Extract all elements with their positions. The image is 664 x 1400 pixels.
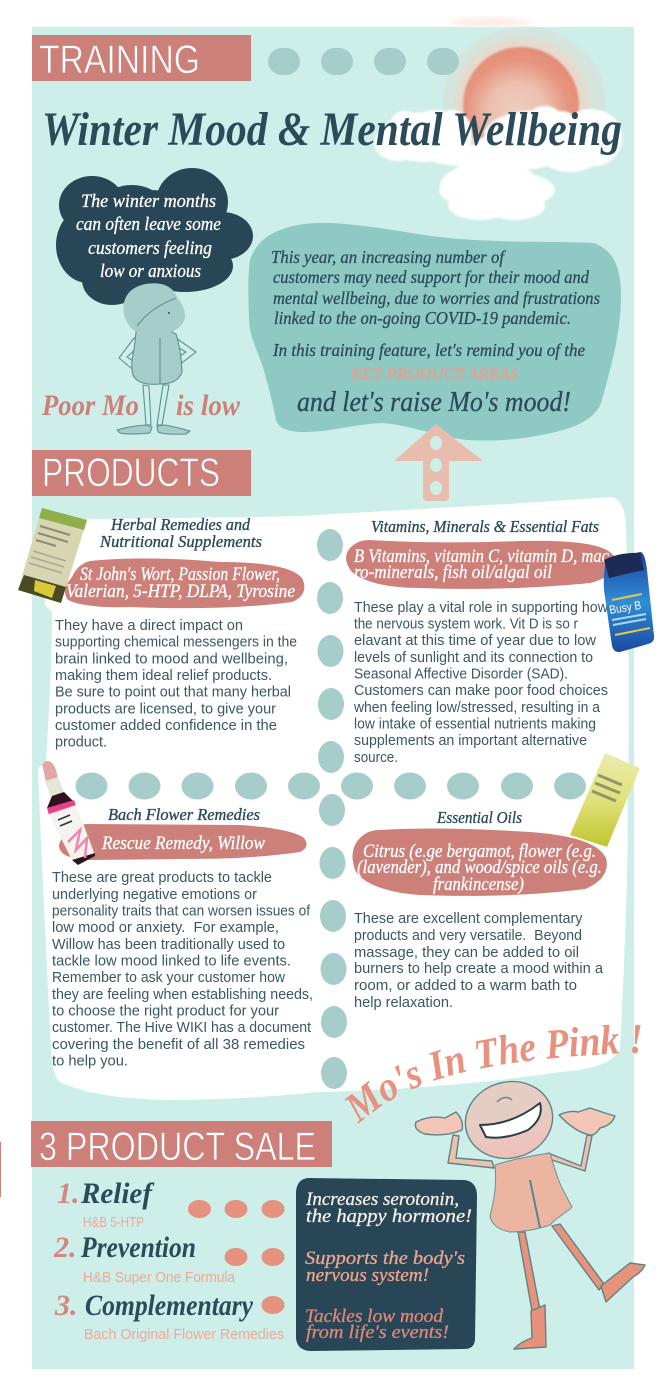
intro text: and let's raise Mo's mood! — [297, 386, 571, 418]
product: herbal box — [18, 508, 87, 603]
benefit 1 — [305, 1189, 472, 1227]
list: three products — [53, 1177, 284, 1343]
pill text — [357, 841, 602, 895]
product: Bach bottle — [42, 761, 95, 865]
intro text — [271, 247, 600, 418]
pink product pill — [346, 540, 615, 589]
benefit 1: the happy hormone! — [306, 1206, 472, 1227]
head — [457, 1072, 561, 1168]
body text: the nervous system work. Vit D is so r — [354, 616, 578, 632]
body text: levels of sunlight and its connection to — [354, 649, 593, 666]
item 1 — [57, 1177, 155, 1231]
benefit 3 — [305, 1306, 449, 1343]
horizontal divider dots — [76, 772, 586, 800]
cloud text: The winter months — [81, 191, 216, 212]
body text: to help you. — [52, 1052, 128, 1070]
section: herbal remedies — [55, 515, 304, 751]
training header: TRAINING — [39, 38, 200, 82]
pill text: Rescue Remedy, Willow — [101, 833, 265, 854]
pink product pill — [59, 824, 307, 860]
benefit 2: nervous system! — [306, 1265, 429, 1286]
header dots — [268, 48, 459, 75]
body text: source. — [354, 749, 398, 766]
benefit 3: Tackles low mood — [305, 1306, 444, 1327]
cloud behind title — [374, 106, 622, 220]
body text: making them ideal relief products. — [55, 667, 272, 684]
body text: help relaxation. — [354, 994, 453, 1011]
product: Busy B bottle: Busy B — [608, 598, 642, 617]
body text: These are great products to tackle — [52, 869, 272, 886]
intro text: customers may need support for their mood and — [273, 267, 590, 287]
pill text — [66, 564, 295, 602]
body text: customer. The Hive WIKI has a document — [52, 1019, 312, 1036]
intro blob — [248, 223, 621, 441]
character: happy Mo — [415, 1072, 645, 1349]
body text: Seasonal Affective Disorder (SAD). — [354, 666, 568, 682]
intro text: This year, an increasing number of — [271, 247, 507, 267]
item 3: Complementary — [85, 1289, 254, 1322]
body text — [354, 910, 604, 1011]
body text: when feeling low/stressed, resulting in a — [353, 699, 601, 716]
pill text: frankincense) — [433, 874, 524, 895]
body text: underlying negative emotions or — [52, 886, 257, 903]
character: sad Mo — [117, 283, 196, 434]
connecting dots — [188, 1200, 284, 1314]
pill text: Valerian, 5-HTP, DLPA, Tyrosine — [66, 581, 295, 602]
caption: Poor Mo is low — [41, 389, 241, 422]
body text: burners to help create a mood within a — [354, 960, 604, 977]
3 product sale header: 3 PRODUCT SALE — [39, 1125, 316, 1169]
body text: tackle low mood linked to life events. — [52, 952, 291, 970]
item 3: 3. — [54, 1289, 78, 1322]
benefit 3: from life's events! — [306, 1322, 449, 1343]
item 1: H&B 5-HTP — [83, 1214, 144, 1231]
body text: products and very versatile. Beyond — [354, 927, 582, 944]
body text: Remember to ask your customer how — [52, 969, 285, 986]
section: Bach flower remedies — [52, 805, 313, 1070]
heading — [99, 515, 262, 551]
product: Busy B bottle — [604, 552, 654, 652]
item 1: Relief — [80, 1177, 155, 1210]
pill text: ro-minerals, fish oil/algal oil — [354, 562, 552, 583]
cloud text: low or anxious — [100, 261, 201, 282]
pink product pill — [65, 558, 304, 608]
smile — [480, 1103, 541, 1138]
body text: products are licensed, to give your — [55, 700, 276, 717]
body text: room, or added to a warm bath to — [354, 977, 577, 994]
cloud text: customers feeling — [88, 238, 212, 259]
cloud text — [76, 191, 221, 282]
benefit 2 — [305, 1248, 465, 1286]
left edge mark — [0, 1142, 1, 1197]
item 2: H&B Super One Formula — [83, 1269, 236, 1286]
pill text: B Vitamins, vitamin C, vitamin D, mac — [354, 546, 609, 567]
heading: Nutritional Supplements — [99, 532, 262, 551]
section: vitamins — [346, 517, 615, 766]
products header: PRODUCTS — [42, 451, 220, 495]
intro text: mental wellbeing, due to worries and frustrations — [273, 288, 600, 308]
body text: Willow has been traditionally used to — [52, 936, 285, 953]
heading: Bach Flower Remedies — [108, 805, 260, 824]
benefits box — [296, 1178, 477, 1351]
body text: supplements an important alternative — [354, 732, 587, 749]
vertical divider dots — [317, 529, 347, 1089]
up arrow — [394, 424, 483, 501]
body text: low mood or anxiety. For example, — [52, 919, 279, 936]
cloud text: can often leave some — [76, 214, 221, 235]
body text: These play a vital role in supporting how — [354, 599, 608, 616]
pink product pill — [353, 829, 607, 896]
product: essential oil box — [570, 753, 640, 847]
heading: Vitamins, Minerals & Essential Fats — [371, 517, 599, 536]
body text: product. — [55, 734, 107, 751]
body text: low intake of essential nutrients making — [354, 716, 596, 732]
pill text: St John's Wort, Passion Flower, — [80, 564, 280, 585]
item 1: 1. — [57, 1177, 80, 1210]
intro text: linked to the on-going COVID-19 pandemic. — [274, 308, 571, 328]
body text — [52, 869, 313, 1070]
sun — [443, 17, 605, 173]
body text: massage, they can be added to oil — [354, 944, 579, 961]
caption: Poor Mo is low: Poor Mo — [41, 389, 139, 422]
Mo's In The Pink caption: Mo's In The Pink ! — [344, 1024, 641, 1124]
item 2: Prevention — [80, 1231, 196, 1264]
item 2 — [53, 1231, 236, 1286]
pill text: (lavender), and wood/spice oils (e.g. — [357, 857, 602, 878]
dark thought cloud — [56, 168, 253, 305]
body text: they are feeling when establishing needs, — [52, 986, 313, 1003]
body text: elavant at this time of year due to low — [354, 632, 596, 649]
intro text: KEY PRODUCT AREAS — [350, 366, 518, 383]
body text: customer added confidence in the — [55, 717, 277, 734]
benefit 1: Increases serotonin, — [305, 1189, 459, 1210]
intro text: In this training feature, let's remind you of the — [272, 340, 585, 360]
body text: personality traits that can worsen issues of — [52, 902, 311, 920]
white products panel — [38, 497, 629, 1100]
body text — [55, 617, 297, 751]
legs and feet — [514, 1224, 645, 1349]
pill text: Citrus (e.ge bergamot, flower (e.g. — [363, 841, 596, 862]
body text: They have a direct impact on — [55, 617, 243, 634]
body text: brain linked to mood and wellbeing, — [55, 650, 288, 667]
body text: covering the benefit of all 38 remedies — [52, 1036, 305, 1053]
body text: Be sure to point out that many herbal — [55, 684, 291, 701]
section: essential oils — [353, 808, 607, 1011]
body text — [353, 599, 608, 766]
body text: Customers can make poor food choices — [354, 682, 608, 699]
item 3 — [54, 1289, 284, 1343]
heading: Essential Oils — [436, 808, 522, 827]
dress — [490, 1153, 572, 1232]
item 3: Bach Original Flower Remedies — [84, 1326, 284, 1343]
body text: These are excellent complementary — [354, 910, 583, 927]
pill text — [354, 546, 609, 583]
benefit 2: Supports the body's — [305, 1248, 465, 1269]
heading: Herbal Remedies and — [110, 515, 250, 534]
body text: supporting chemical messengers in the — [55, 634, 297, 651]
item 2: 2. — [53, 1231, 76, 1264]
body text: to choose the right product for your — [52, 1002, 279, 1020]
arms — [448, 1135, 592, 1171]
caption: Poor Mo is low: is low — [176, 389, 241, 422]
hands — [415, 1108, 615, 1135]
